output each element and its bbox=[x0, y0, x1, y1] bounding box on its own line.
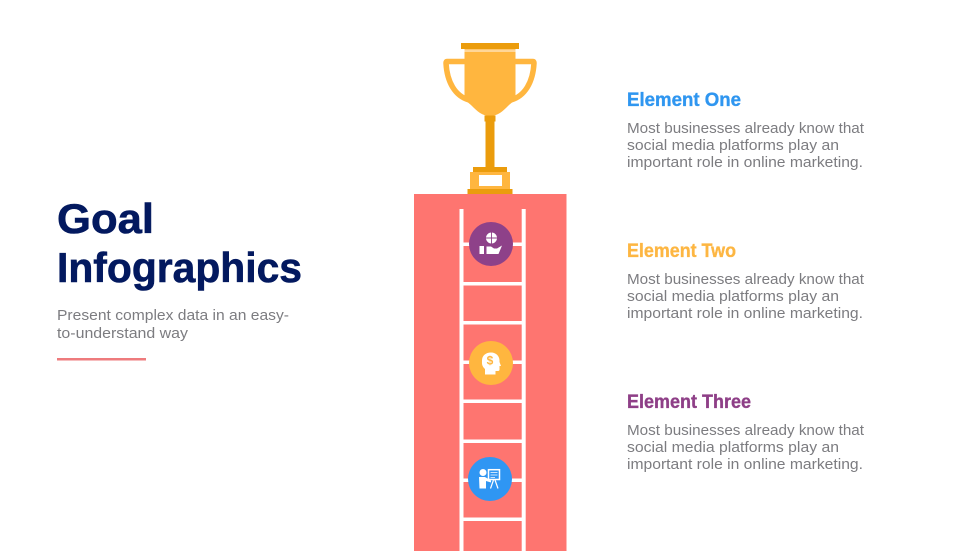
element three bbox=[627, 392, 865, 473]
title bbox=[57, 195, 302, 291]
icon: head with dollar: $ bbox=[487, 354, 494, 368]
element one: Most businesses already know that bbox=[627, 120, 865, 137]
title: Goal bbox=[57, 195, 154, 242]
icon: hand holding globe bbox=[469, 222, 513, 266]
element three: important role in online marketing. bbox=[627, 456, 863, 473]
element three: Element Three bbox=[627, 392, 751, 413]
pillar bbox=[414, 194, 566, 551]
ladder bbox=[460, 209, 526, 551]
element two: Most businesses already know that bbox=[627, 271, 865, 288]
subtitle: to-understand way bbox=[57, 325, 189, 342]
element two: Element Two bbox=[627, 241, 736, 262]
element one: Element One bbox=[627, 90, 741, 111]
icon: trophy bbox=[446, 43, 534, 194]
element one: social media platforms play an bbox=[627, 137, 839, 154]
element two: important role in online marketing. bbox=[627, 305, 863, 322]
accent underline bbox=[57, 358, 146, 360]
element one bbox=[627, 90, 865, 171]
element one: important role in online marketing. bbox=[627, 154, 863, 171]
element two bbox=[627, 241, 865, 322]
element two: social media platforms play an bbox=[627, 288, 839, 305]
element three: social media platforms play an bbox=[627, 439, 839, 456]
element three: Most businesses already know that bbox=[627, 422, 865, 439]
subtitle bbox=[57, 307, 289, 342]
subtitle: Present complex data in an easy- bbox=[57, 307, 289, 324]
icon: head with dollar bbox=[469, 341, 513, 385]
icon: presenter at board bbox=[468, 457, 512, 501]
title: Infographics bbox=[57, 244, 302, 291]
